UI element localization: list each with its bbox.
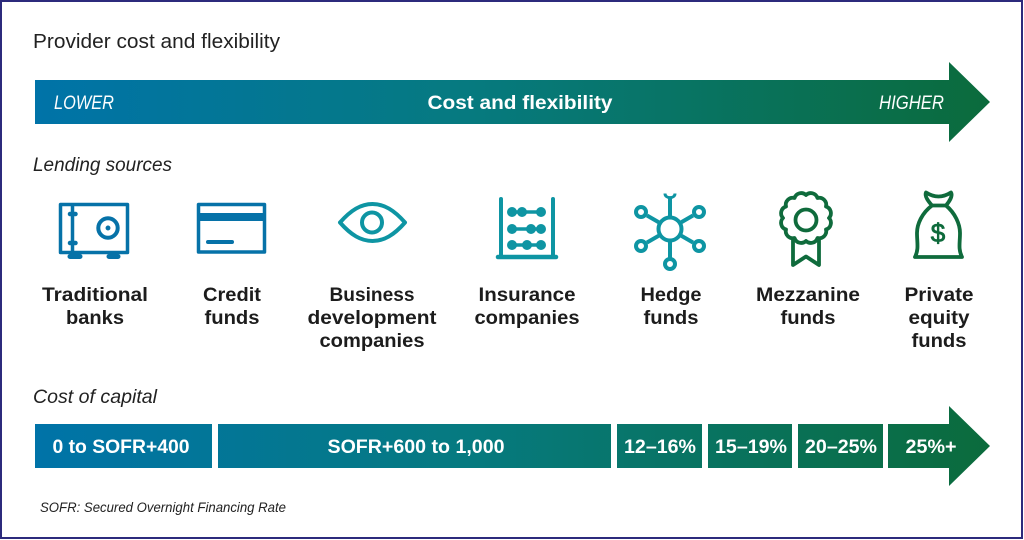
segment bar: cost of capital: 20–25%: [805, 437, 877, 458]
label: private equity funds: Private: [904, 285, 974, 306]
top arrow: cost and flexibility: LOWER: [54, 93, 114, 114]
segment bar: cost of capital: SOFR+600 to 1,000: [328, 437, 504, 458]
label: traditional banks: banks: [66, 308, 124, 329]
icon: rosette award: [781, 193, 831, 265]
label: insurance companies: Insurance: [478, 285, 576, 306]
label: business development companies: Business: [330, 285, 414, 306]
segment bar: cost of capital: 15–19%: [715, 437, 787, 458]
label: mezzanine funds: funds: [780, 308, 836, 329]
title: Provider cost and flexibility: [33, 30, 281, 53]
label: insurance companies: companies: [474, 308, 580, 329]
label: private equity funds: funds: [912, 331, 966, 352]
label: hedge funds: funds: [644, 308, 698, 329]
icon: money bag: [915, 192, 962, 257]
icon: network hub: [636, 194, 704, 269]
label: mezzanine funds: Mezzanine: [756, 285, 860, 306]
segment bar: cost of capital: 12–16%: [624, 437, 696, 458]
icon: credit card: [198, 204, 265, 252]
top arrow: cost and flexibility: [35, 62, 990, 142]
label: hedge funds: Hedge: [640, 285, 702, 306]
label: traditional banks: Traditional: [42, 285, 148, 306]
top arrow: cost and flexibility: HIGHER: [879, 93, 944, 114]
footnote: SOFR: Secured Overnight Financing Rate: [40, 499, 286, 515]
top arrow: cost and flexibility: Cost and flexibility: [428, 93, 613, 114]
label: private equity funds: equity: [908, 308, 970, 329]
icon: eye: [340, 204, 405, 241]
label: business development companies: companies: [320, 331, 424, 352]
icon: money bag: $: [931, 218, 946, 248]
icon: abacus: [498, 199, 556, 257]
label: credit funds: Credit: [203, 285, 262, 306]
label: credit funds: funds: [204, 308, 260, 329]
label: business development companies: development: [308, 308, 437, 329]
heading: cost of capital: Cost of capital: [33, 387, 158, 408]
segment bar: cost of capital: 25%+: [906, 437, 956, 458]
icon: safe: [60, 204, 128, 256]
segment bar: cost of capital: 0 to SOFR+400: [52, 437, 190, 458]
segment bar: cost of capital: [35, 406, 990, 486]
heading: lending sources: Lending sources: [33, 155, 172, 176]
